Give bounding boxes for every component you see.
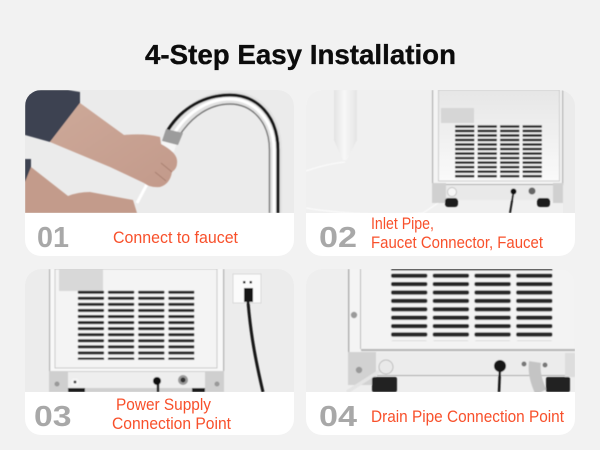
label: power supply connection point <box>112 396 231 433</box>
title: 4-Step Easy Installation <box>145 39 456 70</box>
label: connect to faucet: Connect to faucet <box>113 229 238 247</box>
step number 04: 04 <box>319 401 357 433</box>
photo: close-up of connection points <box>306 269 575 392</box>
photo: filter and machine rear <box>306 90 575 214</box>
step number 02: 02 <box>319 222 357 254</box>
panel: step 04 drain pipe <box>306 269 575 435</box>
label: drain pipe connection point: Drain Pipe Connection Point <box>371 408 564 426</box>
panel: step 01 connect to faucet <box>25 90 294 256</box>
label: inlet pipe, faucet connector, faucet: Faucet Connector, Faucet <box>371 234 543 252</box>
photo: hands connecting tube to faucet <box>25 90 294 213</box>
panel: step 03 power supply <box>25 269 294 435</box>
panel: step 02 inlet pipe <box>306 90 575 256</box>
label: inlet pipe, faucet connector, faucet: Inlet Pipe, <box>371 215 434 233</box>
step number 03: 03 <box>34 401 72 433</box>
label: power supply connection point: Power Supply <box>116 396 212 414</box>
photo: machine rear and wall socket <box>25 269 294 392</box>
step number 01: 01 <box>37 222 69 254</box>
label: power supply connection point: Connection Point <box>112 415 231 433</box>
label: inlet pipe, faucet connector, faucet <box>371 215 543 252</box>
